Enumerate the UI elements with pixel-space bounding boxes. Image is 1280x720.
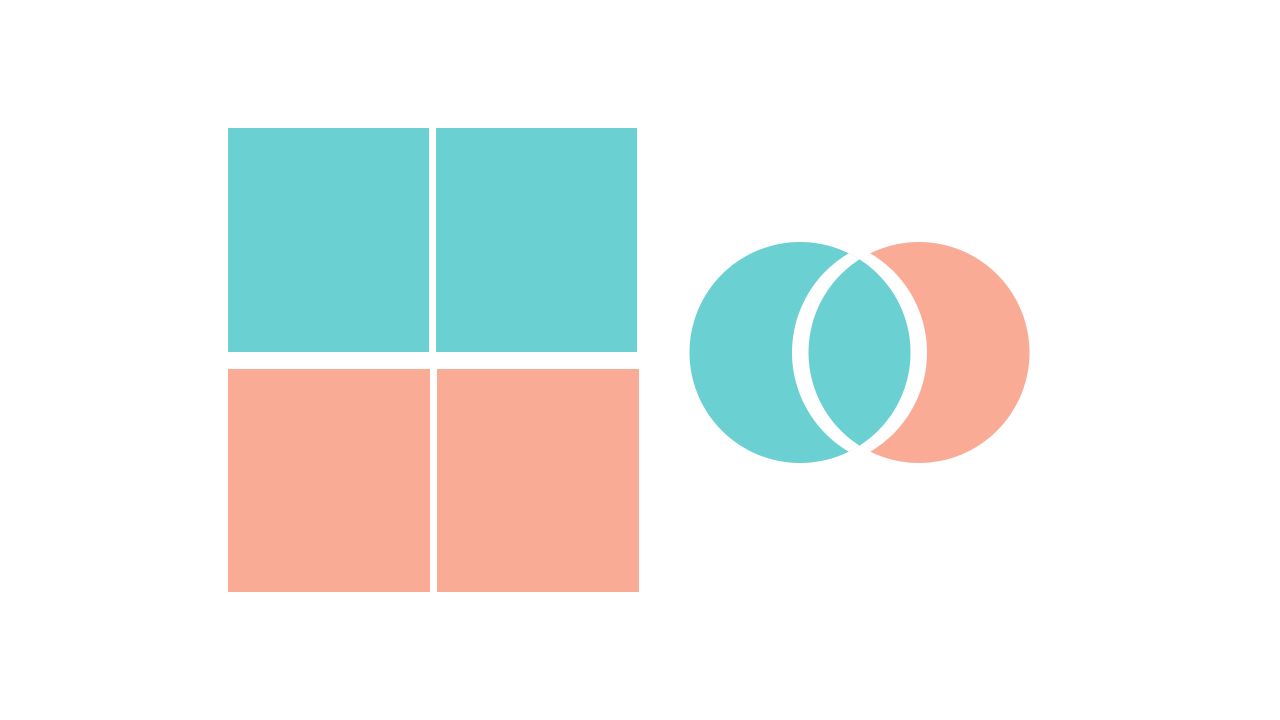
square: top left [228, 128, 429, 352]
square: bottom right [437, 369, 639, 592]
outline: white crescent cut from left circle [792, 254, 910, 452]
panel: four-square grid [228, 128, 639, 592]
circle: left teal [690, 242, 910, 463]
overlap: teal lens [808, 260, 910, 446]
square: bottom left [228, 369, 430, 592]
circle: right coral [808, 242, 1030, 463]
overlap: teal lens with white border [792, 254, 910, 452]
square: top right [436, 128, 637, 352]
outline: white crescent cut from right circle [697, 238, 927, 468]
chart: Venn diagram [690, 238, 1030, 468]
